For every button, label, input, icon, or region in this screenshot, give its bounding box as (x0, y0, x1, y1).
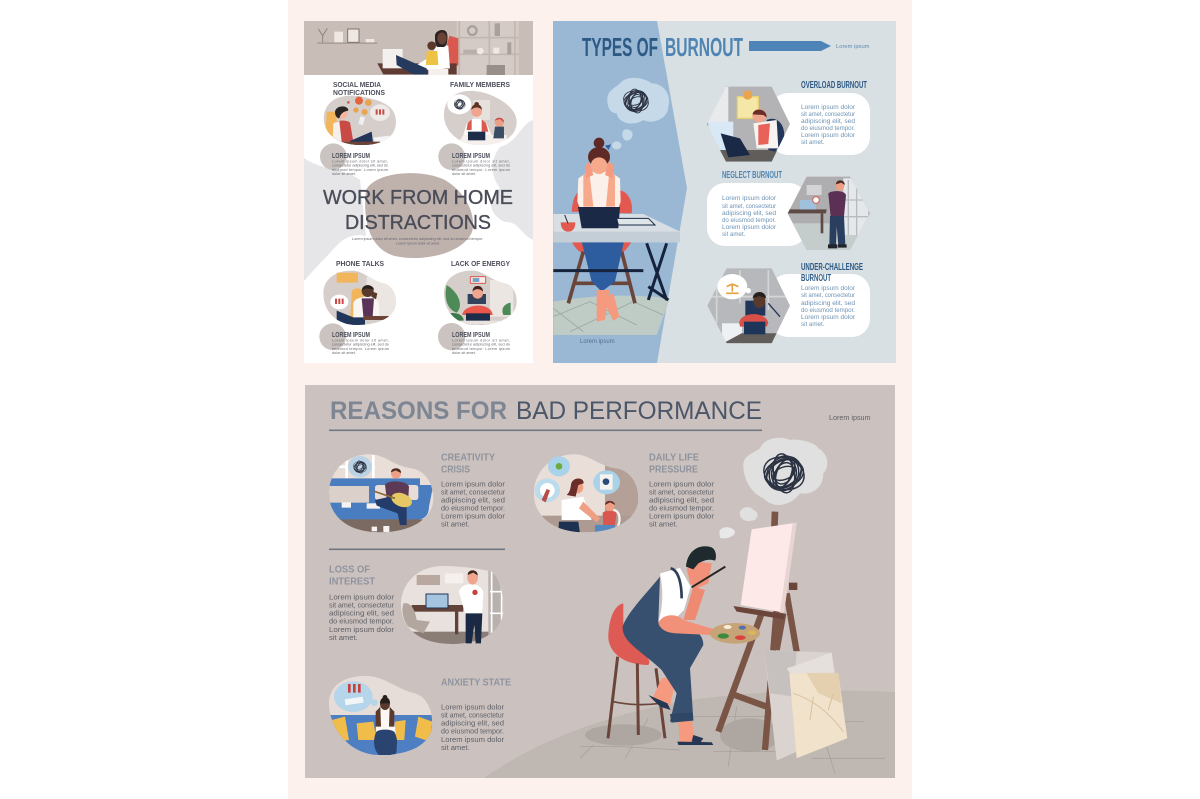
circle accent (319, 323, 346, 350)
text block: adipiscing elit, sed (649, 496, 714, 504)
hexagon illustration (788, 177, 871, 252)
stool (608, 603, 649, 665)
text block: adipiscing elit, sed (722, 210, 777, 217)
text block (441, 480, 505, 528)
heading and text: phone talks: Lorem ipsum dolor sit amet, (332, 338, 389, 342)
title: types of burnout: BURNOUT (665, 32, 743, 62)
floor lines (580, 707, 885, 773)
text block: adipiscing elit, sed (441, 718, 504, 728)
item: loss of interest: INTEREST (329, 576, 375, 588)
illustration (401, 566, 505, 645)
text block: sit amet, consectetur (801, 111, 855, 118)
text block (329, 592, 394, 642)
text block: Lorem ipsum dolor (722, 224, 776, 231)
item: anxiety state (329, 676, 511, 757)
back leg (652, 677, 677, 708)
title (330, 397, 762, 425)
thought bubble (607, 78, 669, 123)
text block: Lorem ipsum dolor (441, 512, 505, 520)
hexagon illustration (707, 87, 790, 163)
item: daily life pressure: PRESSURE (649, 464, 698, 476)
grey background blobs (304, 120, 533, 281)
illustration: stressed woman at desk (553, 78, 680, 335)
title: work from home distractions: Lorem ipsum dolor sit amet, consectetur adipiscing elit, sed do eiusmod tempor. (352, 237, 483, 241)
white pill (770, 93, 870, 155)
arm to palette (658, 615, 717, 635)
heading and text: social media notifications: LOREM IPSUM (332, 151, 370, 160)
text block (801, 104, 856, 146)
front foot and sandals (678, 720, 712, 745)
text block: do eiusmod tempor. (722, 217, 776, 224)
illustration (534, 454, 642, 535)
text block: Lorem ipsum dolor (801, 285, 855, 292)
divider (329, 548, 505, 550)
item: under-challenge burnout (707, 262, 870, 345)
lorem ipsum label: Lorem ipsum (829, 413, 871, 422)
heading: ANXIETY STATE (441, 678, 511, 688)
heading and text: family members: LOREM IPSUM (452, 151, 490, 160)
lorem ipsum caption: Lorem ipsum (580, 339, 615, 345)
chair (572, 190, 632, 213)
canvas (741, 523, 797, 613)
text block: sit amet, consectetur (441, 710, 504, 720)
heading and text: family members: FAMILY MEMBERS (450, 80, 510, 89)
heading and text: phone talks: consectetur adipiscing elit, sed do (332, 343, 389, 347)
heading and text: family members: dolor sit amet. (452, 172, 476, 176)
text block: sit amet. (649, 520, 678, 528)
panel: reasons for bad performance (305, 385, 895, 778)
heading and text: phone talks: eiusmod tempor. Lorem ipsum (332, 347, 389, 351)
heading and text: lack of energy: dolor sit amet. (452, 351, 476, 355)
heading and text: lack of energy: eiusmod tempor. Lorem ipsum (452, 347, 510, 351)
background column (288, 0, 912, 799)
heading and text: lack of energy: LACK OF ENERGY (451, 259, 510, 268)
heading and text: phone talks: PHONE TALKS (336, 259, 384, 268)
woman (577, 172, 621, 208)
item: overload burnout (707, 80, 870, 163)
top illustration band (304, 21, 533, 75)
text block: sit amet. (801, 321, 825, 328)
text block: Lorem ipsum dolor (801, 104, 855, 111)
text block: do eiusmod tempor. (441, 726, 504, 736)
hexagon illustration (707, 268, 790, 345)
title underline (329, 430, 762, 431)
blue chevron background (553, 21, 687, 363)
heading and text: social media notifications: Lorem ipsum dolor sit amet, (332, 159, 388, 163)
heading: NEGLECT BURNOUT (722, 170, 782, 181)
heading and text: social media notifications: SOCIAL MEDIA (333, 80, 382, 89)
item: neglect burnout (707, 170, 871, 252)
text block: Lorem ipsum dolor (649, 480, 714, 488)
text block: Lorem ipsum dolor (801, 132, 855, 139)
arrow (749, 41, 831, 51)
text block: sit amet, consectetur (649, 488, 714, 496)
mug (561, 222, 575, 232)
heading and text: social media notifications: dolor sit amet. (332, 172, 356, 176)
title: BAD PERFORMANCE (516, 397, 762, 425)
text block: Lorem ipsum dolor (649, 512, 714, 520)
title: work from home distractions: Lorem ipsum dolor sit amet. (396, 241, 440, 245)
title: types of burnout: TYPES OF (582, 32, 658, 62)
heading: CREATIVITY (441, 452, 495, 464)
text block: Lorem ipsum dolor (441, 702, 504, 712)
white pill (770, 274, 870, 337)
circle accent (438, 323, 465, 350)
heading: UNDER-CHALLENGE (801, 262, 863, 273)
scene: family members (438, 91, 517, 170)
text block: sit amet. (329, 633, 358, 642)
heading and text: social media notifications (332, 80, 388, 176)
text block: sit amet, consectetur (801, 292, 855, 299)
circle accent (320, 143, 347, 170)
text block: Lorem ipsum dolor (329, 592, 394, 602)
item: creativity crisis (329, 452, 505, 534)
heading and text: phone talks: LOREM IPSUM (332, 330, 370, 339)
heading and text: social media notifications: NOTIFICATIONS (333, 88, 385, 97)
text block: sit amet, consectetur (441, 488, 505, 496)
text block: Lorem ipsum dolor (441, 735, 504, 744)
text block: Lorem ipsum dolor (722, 195, 776, 202)
text block: sit amet, consectetur (329, 600, 394, 610)
white pill (707, 183, 807, 246)
hair (686, 546, 716, 569)
lorem ipsum label: Lorem ipsum (836, 44, 870, 50)
text block: sit amet. (722, 231, 746, 238)
neck and face (687, 562, 712, 588)
text block: adipiscing elit, sed (801, 118, 856, 125)
stacked canvases (764, 650, 845, 761)
easel (718, 512, 797, 750)
item: daily life pressure (534, 452, 714, 535)
text block: Lorem ipsum dolor (441, 480, 505, 488)
illustration (329, 454, 436, 534)
heading and text: social media notifications: consectetur adipiscing elit, sed do (332, 164, 388, 168)
text block: adipiscing elit, sed (441, 496, 505, 504)
text block: sit amet. (801, 139, 825, 146)
panel: types of burnout (553, 21, 896, 363)
heading and text: phone talks: dolor sit amet. (332, 351, 356, 355)
text block (801, 285, 856, 328)
illustration: painter at easel (580, 438, 885, 773)
heading and text: lack of energy: consectetur adipiscing elit, sed do (452, 343, 510, 347)
item: under-challenge burnout: BURNOUT (801, 273, 831, 284)
title: work from home distractions: DISTRACTIONS (345, 212, 491, 234)
scene: social media notifications (320, 96, 396, 170)
item: creativity crisis: CRISIS (441, 464, 470, 476)
title: work from home distractions (323, 187, 513, 245)
text block: adipiscing elit, sed (801, 300, 856, 307)
thought bubble (743, 438, 827, 505)
text block: Lorem ipsum dolor (801, 314, 855, 321)
palette (710, 623, 760, 644)
heading and text: social media notifications: eiusmod tempor. Lorem ipsum (332, 168, 388, 172)
heading and text: lack of energy: Lorem ipsum dolor sit amet, (452, 338, 510, 342)
scene: lack of energy (438, 271, 517, 350)
text block (722, 195, 777, 238)
text block: sit amet. (441, 520, 470, 528)
heading: LOSS OF (329, 564, 370, 576)
text block: do eiusmod tempor. (649, 504, 714, 512)
circle accent (438, 143, 465, 170)
text block: sit amet, consectetur (722, 203, 776, 210)
laptop (578, 207, 620, 228)
item: loss of interest (329, 564, 505, 645)
text block: sit amet. (441, 743, 470, 752)
heading and text: family members: consectetur adipiscing elit, sed do (452, 164, 510, 168)
text block: do eiusmod tempor. (801, 125, 855, 132)
text block: do eiusmod tempor. (801, 307, 855, 314)
heading: DAILY LIFE (649, 452, 699, 464)
heading: OVERLOAD BURNOUT (801, 80, 867, 91)
title: REASONS FOR (330, 397, 507, 425)
text block: do eiusmod tempor. (329, 616, 394, 626)
heading and text: phone talks (332, 259, 389, 355)
heading and text: lack of energy: LOREM IPSUM (452, 330, 490, 339)
illustration (329, 676, 432, 757)
heading and text: family members (450, 80, 510, 176)
title: work from home distractions: WORK FROM HOME (323, 187, 513, 209)
panel: work from home distractions (304, 21, 533, 363)
skirt (582, 242, 624, 292)
scene: phone talks (319, 271, 397, 350)
central brown blob (365, 173, 473, 258)
desk (553, 214, 680, 242)
heading and text: family members: Lorem ipsum dolor sit amet, (452, 159, 510, 163)
shirt (658, 568, 691, 624)
text block: Lorem ipsum dolor (329, 625, 394, 634)
text block: do eiusmod tempor. (441, 504, 505, 512)
text block (441, 702, 504, 752)
text block: adipiscing elit, sed (329, 608, 394, 618)
overalls (623, 577, 703, 722)
heading and text: lack of energy (451, 259, 510, 355)
text block (649, 480, 714, 528)
heading and text: family members: eiusmod tempor. Lorem ipsum (452, 168, 510, 172)
brush (692, 567, 725, 587)
floor shape (484, 690, 895, 778)
arm supporting face (683, 587, 705, 620)
